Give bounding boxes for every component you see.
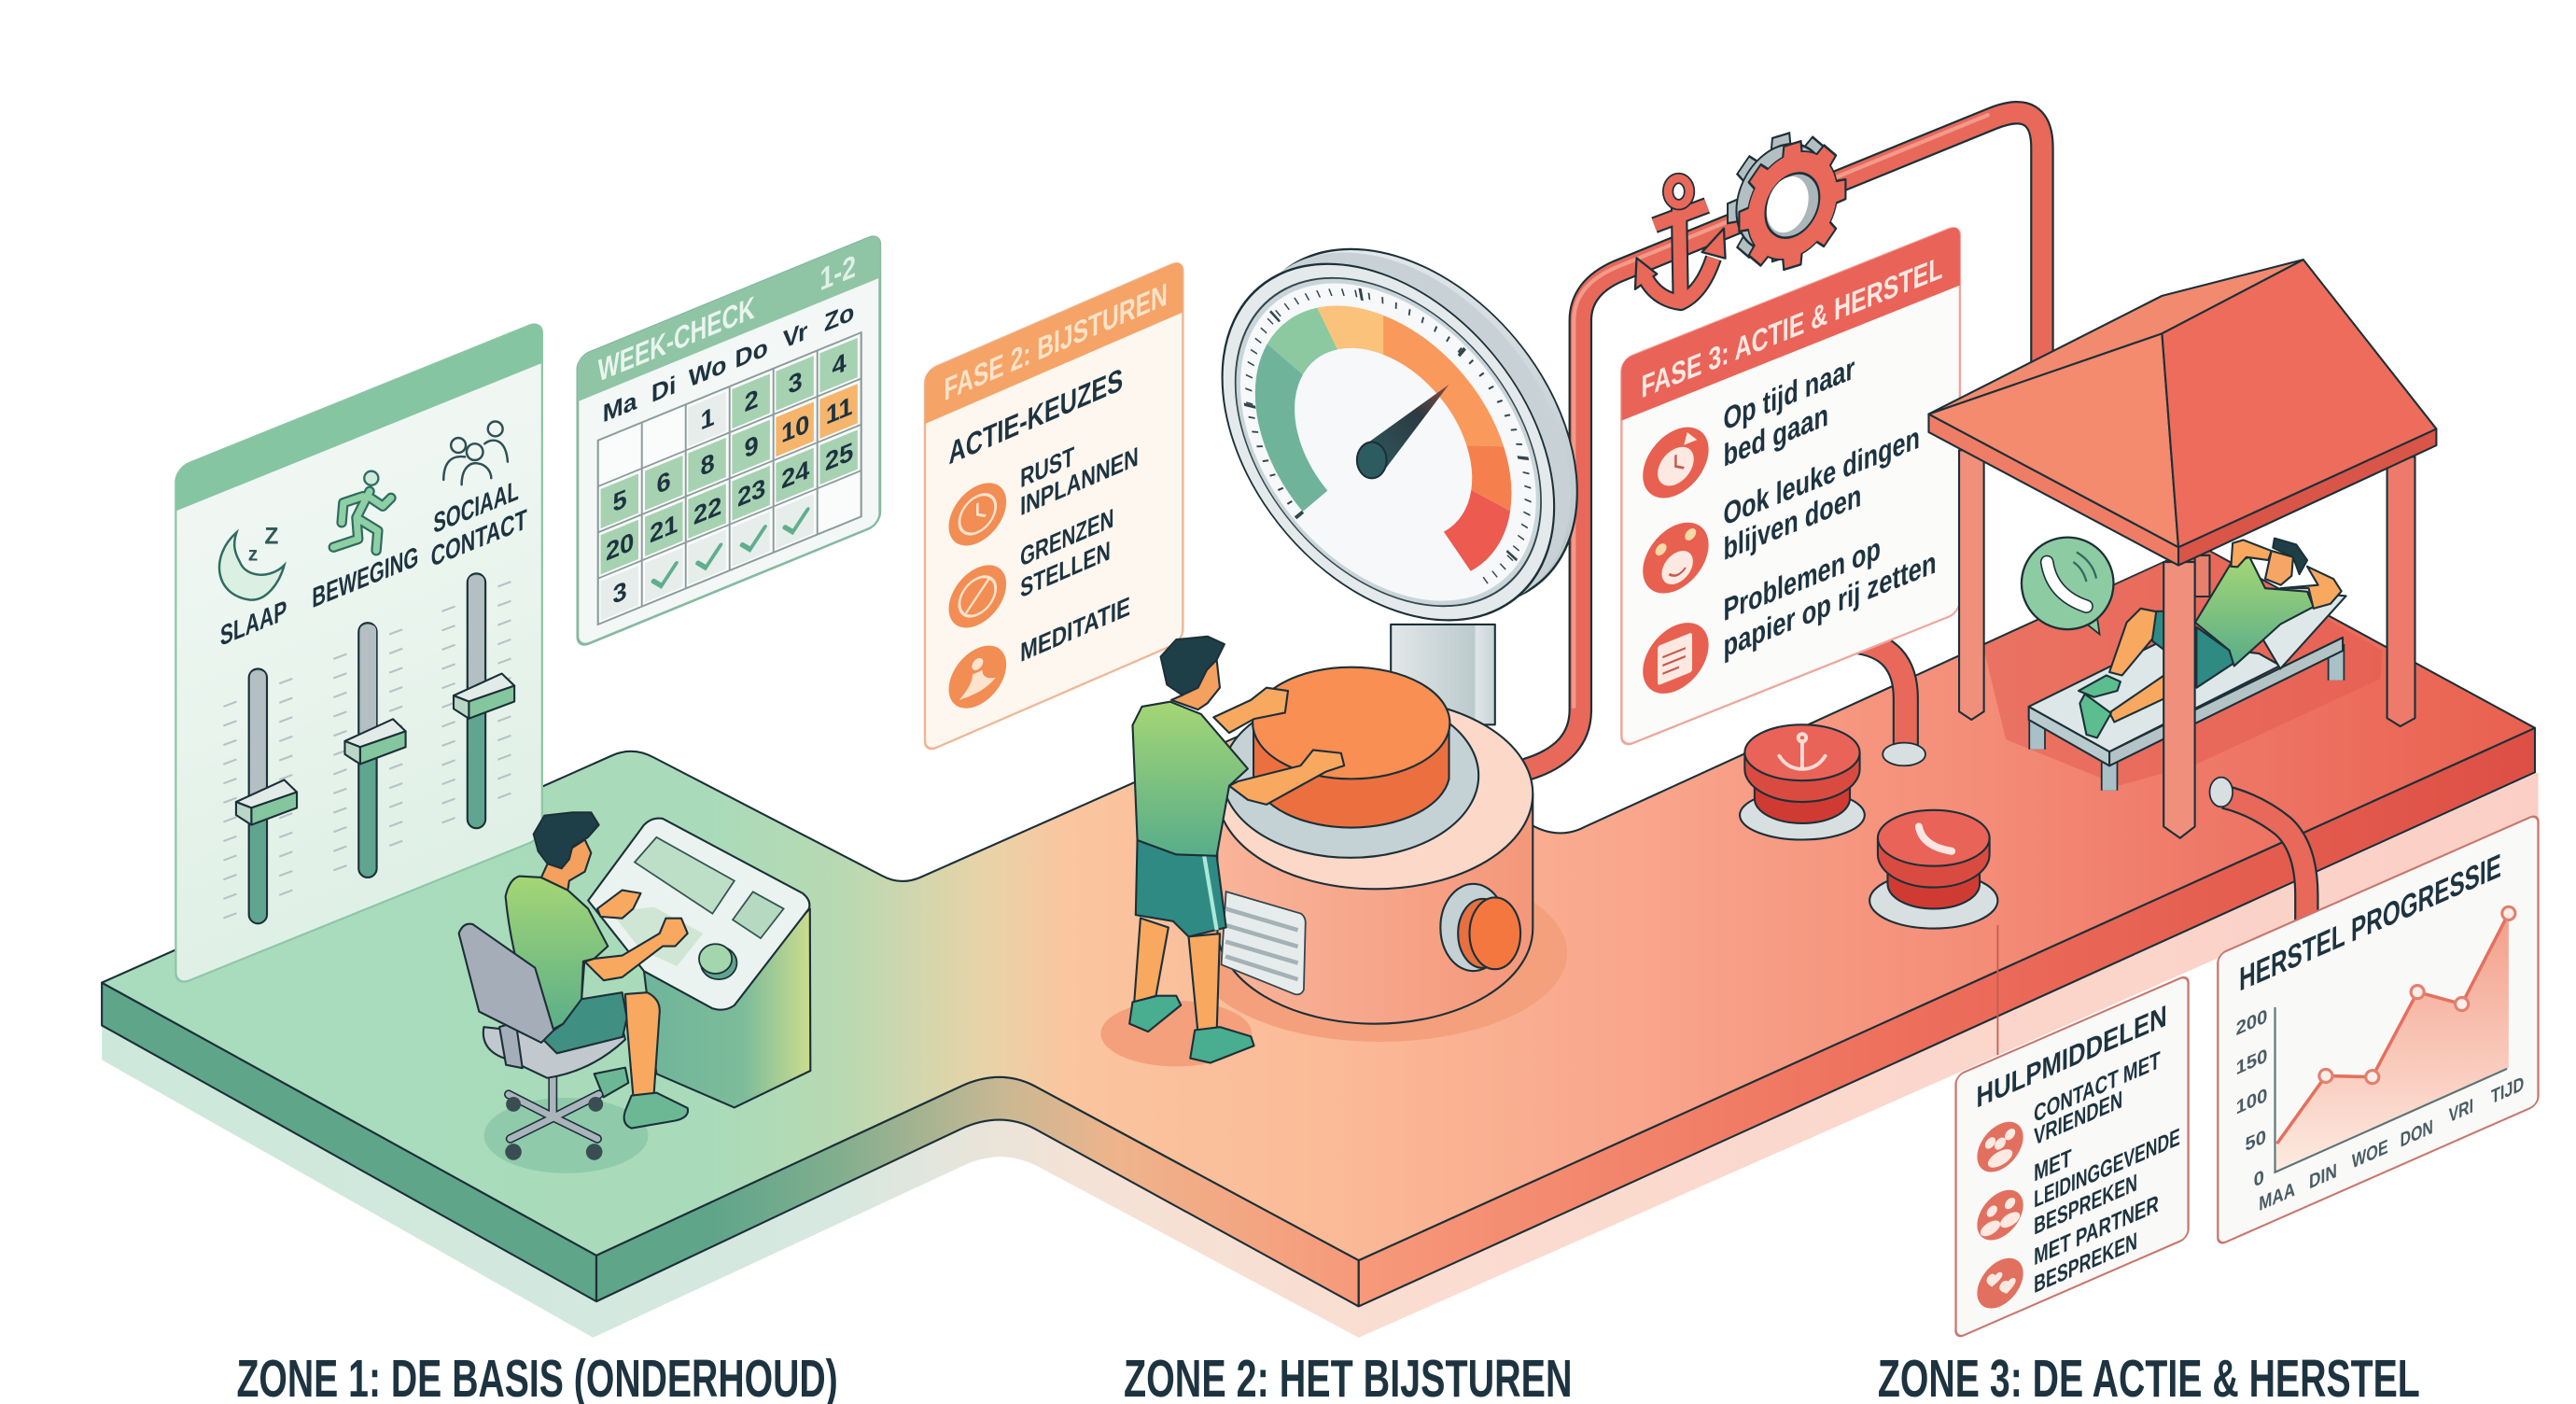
- icon: anchor: [1635, 178, 1726, 302]
- item: met partner bespreken: MET PARTNER: [2034, 1189, 2159, 1271]
- option: rust inplannen: [949, 414, 1139, 555]
- gauge colour arcs: [1275, 293, 1491, 570]
- roof: [1928, 260, 2436, 566]
- straight leg: [2109, 675, 2164, 722]
- x axis labels: WOE: [2352, 1135, 2388, 1172]
- item: problemen op papier op rij zetten: papier op rij zetten: [1723, 545, 1937, 665]
- panel header: FASE 3: ACTIE & HERSTEL: [1641, 250, 1942, 405]
- calendar title: WEEK-CHECK: [598, 289, 755, 389]
- line chart: [2275, 906, 2515, 1172]
- shirt: [506, 877, 608, 1035]
- item: contact met vrienden: [1977, 1046, 2161, 1180]
- slider: beweging: [333, 623, 406, 878]
- weekday headers: Wo: [689, 349, 726, 393]
- head: [2265, 539, 2307, 585]
- heading: hulpmiddelen: HULPMIDDELEN: [1977, 999, 2167, 1116]
- chair: [483, 1022, 625, 1160]
- panel: week-check calendar: [578, 233, 880, 648]
- person resting: [2079, 539, 2342, 737]
- calendar grid: 23: [737, 473, 765, 513]
- far leg: [595, 1068, 628, 1097]
- gauge ticks: [1249, 248, 1528, 605]
- console: [588, 819, 810, 1107]
- gauge: pressure dial: [1223, 197, 1577, 673]
- shirt: [2195, 557, 2314, 666]
- label: slaap: SLAAP: [220, 594, 287, 653]
- x axis labels: VRI: [2449, 1094, 2473, 1127]
- calendar grid: 4: [833, 348, 847, 383]
- weekday headers: Vr: [783, 316, 808, 354]
- gauge needle: [1357, 385, 1449, 478]
- panel: herstel progressie chart: [2218, 814, 2539, 1245]
- icon: moon: [219, 525, 285, 600]
- pipe: floor to chart: [2209, 778, 2306, 970]
- option: rust inplannen: RUST: [1020, 442, 1074, 494]
- front post: [2163, 562, 2195, 838]
- calendar grid: 5: [613, 484, 627, 518]
- near shoe: [624, 1093, 688, 1129]
- option: grenzen stellen: [949, 503, 1113, 638]
- y axis labels: 50: [2246, 1126, 2266, 1156]
- x axis labels: [2259, 1072, 2524, 1215]
- platform: three-zone isometric floor: [102, 545, 2539, 1338]
- x axis labels: DON: [2401, 1115, 2433, 1152]
- button: phone: [1869, 810, 1997, 929]
- calendar grid: 21: [650, 509, 678, 549]
- item: met leidinggevende bespreken: BESPREKEN: [2034, 1169, 2137, 1241]
- calendar grid: 2: [745, 384, 759, 418]
- y axis labels: [2236, 1005, 2267, 1200]
- icon: gear: [1728, 122, 1845, 284]
- pipe: machine to anchor, gear and roof: [1528, 113, 2042, 769]
- calendar week number: 1-2: [819, 248, 856, 298]
- gear face: [1739, 128, 1845, 284]
- slider: slaap: [223, 668, 297, 923]
- gauge post: [1391, 625, 1495, 724]
- panel: fase 2 bijsturen: [925, 260, 1183, 752]
- item: op tijd naar bed gaan: Op tijd naar: [1723, 351, 1855, 438]
- pipe: panel to floor: [1854, 641, 1925, 765]
- x axis labels: TIJD: [2491, 1072, 2524, 1108]
- heading: actie-keuzes: ACTIE-KEUZES: [949, 361, 1123, 471]
- calendar grid: 10: [781, 409, 809, 449]
- item: met leidinggevende bespreken: [1977, 1097, 2180, 1265]
- weekday headers: Di: [651, 370, 676, 408]
- callout line: [1996, 925, 1998, 1055]
- label: sociaal contact: SOCIAAL: [433, 474, 519, 540]
- left post: [1959, 450, 1984, 720]
- calendar grid: 3: [613, 576, 627, 611]
- vent: [1222, 892, 1306, 994]
- gear depth: [1728, 122, 1826, 275]
- option: meditatie: [949, 582, 1130, 718]
- item: ook leuke dingen blijven doen: [1643, 420, 1920, 604]
- panel: fase 3 actie en herstel: [1621, 224, 1960, 748]
- item: problemen op papier op rij zetten: Problemen op: [1723, 531, 1881, 628]
- weekday headers: [603, 297, 854, 428]
- y axis labels: 150: [2236, 1045, 2267, 1079]
- head: [534, 812, 599, 891]
- panel: hulpmiddelen: [1956, 975, 2189, 1339]
- back post: [2195, 555, 2209, 597]
- calendar grid: 3: [789, 366, 803, 400]
- weekday headers: Zo: [824, 297, 854, 337]
- chair back: [459, 924, 553, 1043]
- gazebo and recliner: [1928, 260, 2436, 838]
- calendar grid: 20: [606, 527, 634, 568]
- panel: sliders: [175, 320, 542, 986]
- item: contact met vrienden: CONTACT MET: [2034, 1046, 2161, 1128]
- option: grenzen stellen: GRENZEN: [1020, 503, 1113, 573]
- person at button: zone 2: [1100, 637, 1344, 1066]
- label: beweging: BEWEGING: [312, 540, 418, 614]
- shirt: [1132, 702, 1248, 856]
- near arm: [1229, 750, 1344, 805]
- item: ook leuke dingen blijven doen: blijven doen: [1723, 478, 1861, 568]
- item: ook leuke dingen blijven doen: Ook leuke dingen: [1723, 420, 1920, 533]
- slider: sociaal contact: [441, 573, 514, 828]
- shoes: [2079, 675, 2121, 697]
- panel header: FASE 2: BIJSTUREN: [944, 276, 1168, 408]
- calendar grid: 11: [826, 391, 853, 431]
- icon: runner: [333, 471, 391, 551]
- right post: [2387, 456, 2415, 726]
- near leg: [625, 992, 660, 1102]
- item: op tijd naar bed gaan: [1643, 351, 1855, 509]
- weekday headers: Do: [735, 332, 768, 373]
- calendar grid: 24: [781, 455, 809, 496]
- label: sociaal contact: CONTACT: [431, 503, 527, 573]
- calendar grid: 9: [745, 430, 759, 464]
- arms behind head: [2231, 540, 2342, 609]
- shoes: [1129, 996, 1181, 1032]
- item: met leidinggevende bespreken: LEIDINGGEVENDE: [2034, 1123, 2180, 1214]
- calendar grid: 22: [693, 491, 721, 531]
- chat bubble: [2022, 538, 2114, 634]
- icon: people: [443, 422, 508, 484]
- option: rust inplannen: INPLANNEN: [1020, 442, 1139, 522]
- machine: big orange button: [1193, 667, 1567, 1042]
- x axis labels: DIN: [2309, 1158, 2337, 1193]
- knob: [1440, 884, 1520, 971]
- item: op tijd naar bed gaan: bed gaan: [1723, 398, 1828, 474]
- item: problemen op papier op rij zetten: [1643, 509, 1937, 704]
- icon: moon: z: [248, 543, 258, 565]
- y axis labels: 200: [2236, 1005, 2267, 1040]
- y axis labels: 100: [2236, 1085, 2267, 1119]
- recliner: [2029, 585, 2346, 791]
- head: [1161, 637, 1225, 709]
- legs: [1134, 918, 1169, 1002]
- label: sociaal contact: [431, 470, 527, 573]
- y axis labels: 0: [2254, 1166, 2264, 1191]
- button cap: [1253, 667, 1449, 828]
- x axis labels: MAA: [2259, 1177, 2295, 1215]
- icon: moon: Z: [264, 525, 278, 550]
- calendar grid: [598, 332, 861, 625]
- item: met partner bespreken: BESPREKEN: [2034, 1227, 2137, 1299]
- item: contact met vrienden: VRIENDEN: [2034, 1086, 2122, 1151]
- item: met leidinggevende bespreken: MET: [2034, 1144, 2072, 1186]
- shorts: [1136, 840, 1226, 936]
- weekday headers: Ma: [603, 386, 637, 428]
- option: grenzen stellen: STELLEN: [1020, 536, 1111, 604]
- button: anchor: [1740, 724, 1865, 840]
- far arm: [597, 891, 640, 919]
- calendar grid: 6: [657, 466, 671, 500]
- bent leg: [2109, 609, 2163, 675]
- near arm: [585, 919, 688, 980]
- shorts: [2196, 627, 2234, 688]
- calendar grid: 8: [701, 448, 715, 483]
- option: meditatie: MEDITATIE: [1020, 591, 1130, 668]
- calendar grid: 1: [701, 402, 715, 436]
- shorts: [542, 956, 627, 1053]
- item: met partner bespreken: [1977, 1189, 2159, 1324]
- calendar grid: 25: [825, 437, 853, 477]
- person at console: zone 1: [459, 812, 810, 1173]
- far arm: [1213, 688, 1288, 733]
